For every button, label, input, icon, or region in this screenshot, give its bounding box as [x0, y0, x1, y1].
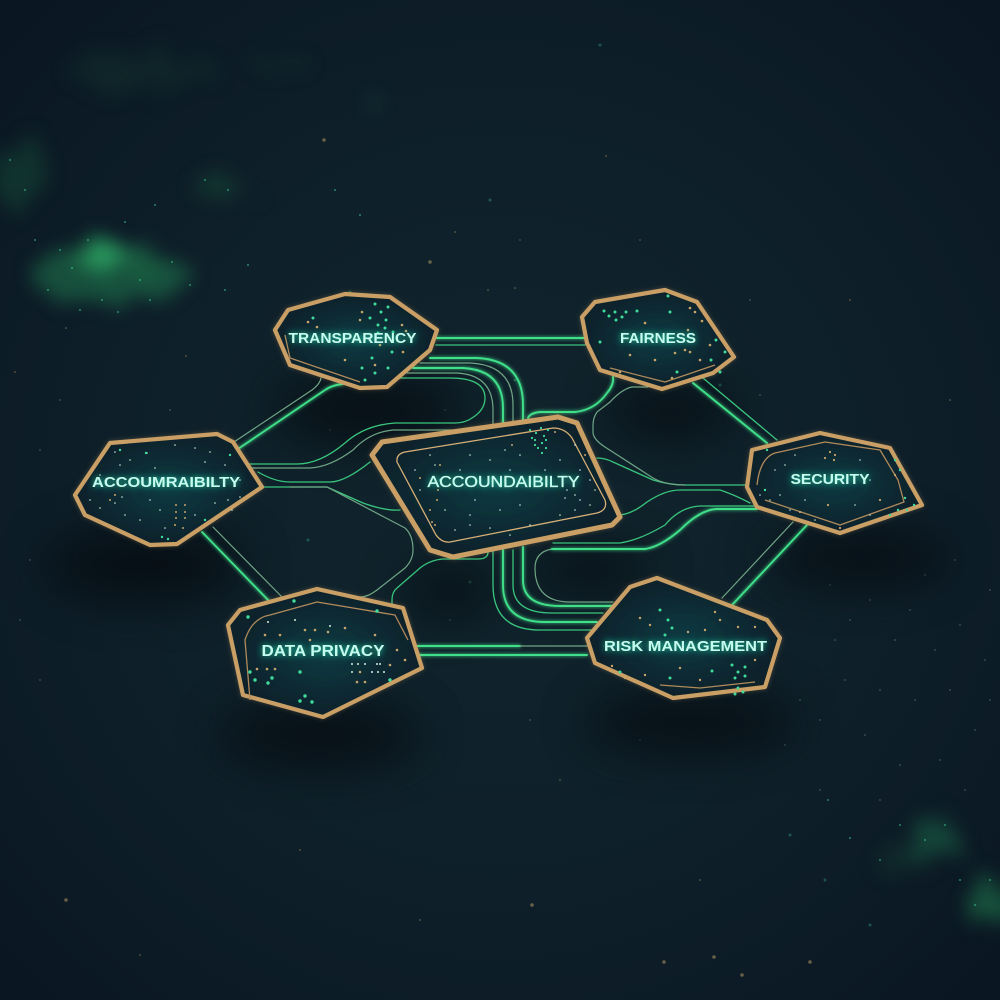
label: security: SECURITY — [790, 472, 870, 488]
trace: accountability S-curve to transparency — [248, 378, 485, 464]
trace: security to centre, second — [553, 506, 757, 543]
trace: accountability to centre lower — [263, 487, 400, 510]
trace: transparency to accountability, dim — [234, 378, 321, 442]
trace: data privacy to risk management, upper — [417, 645, 520, 647]
trace: transparency to fairness — [436, 337, 585, 339]
label: risk management: RISK MANAGEMENT — [604, 638, 767, 655]
drop shadows beneath nodes — [45, 376, 950, 767]
trace: centre to security, upper — [597, 458, 747, 485]
trace: security S-curve to risk management — [535, 549, 613, 602]
label: transparency: TRANSPARENCY — [288, 331, 417, 347]
label: central accountability: ACCOUNDAIBILTY — [428, 474, 580, 491]
trace: accountability to centre upper — [258, 462, 370, 482]
trace: concentric arcs from transparency to centre — [407, 358, 523, 425]
trace: accountability to data privacy, dim — [213, 527, 282, 597]
node: accountability left — [75, 434, 262, 545]
label: fairness: FAIRNESS — [620, 331, 696, 347]
label: data privacy: DATA PRIVACY — [262, 643, 385, 660]
trace: fairness to centre — [528, 377, 613, 418]
trace: accountability to data privacy via bend — [290, 487, 413, 597]
trace: centre to security — [620, 490, 750, 515]
trace: transparency to accountability — [238, 384, 343, 449]
node: transparency — [275, 294, 437, 388]
node: risk management — [587, 578, 780, 698]
node: fairness — [582, 290, 734, 389]
green mist: lower right — [876, 820, 1000, 929]
trace: security to lower centre — [552, 509, 757, 549]
circuit traces connecting the nodes — [202, 338, 807, 655]
green mist: upper left — [0, 50, 385, 305]
label: accountability left: ACCOUMRAIBILTY — [92, 475, 240, 491]
node: central accountability — [372, 417, 620, 557]
trace: fairness to security, dim — [703, 378, 777, 440]
trace: accountability S-curve to centre — [250, 430, 453, 468]
trace: security to risk management, dim — [722, 522, 793, 598]
trace: centre to data privacy — [392, 552, 488, 605]
trace: accountability to data privacy — [202, 532, 270, 602]
trace: fairness to security bend — [593, 387, 685, 485]
node: security — [747, 433, 922, 533]
trace: data privacy to risk management — [417, 654, 587, 656]
trace: concentric arcs from centre to risk management — [493, 547, 613, 630]
node: data privacy — [228, 589, 422, 717]
trace: security to risk management — [732, 525, 807, 605]
trace: upper link continuation — [520, 645, 587, 647]
trace: fairness to security — [693, 383, 767, 443]
trace: transparency to fairness, lower — [436, 344, 585, 346]
